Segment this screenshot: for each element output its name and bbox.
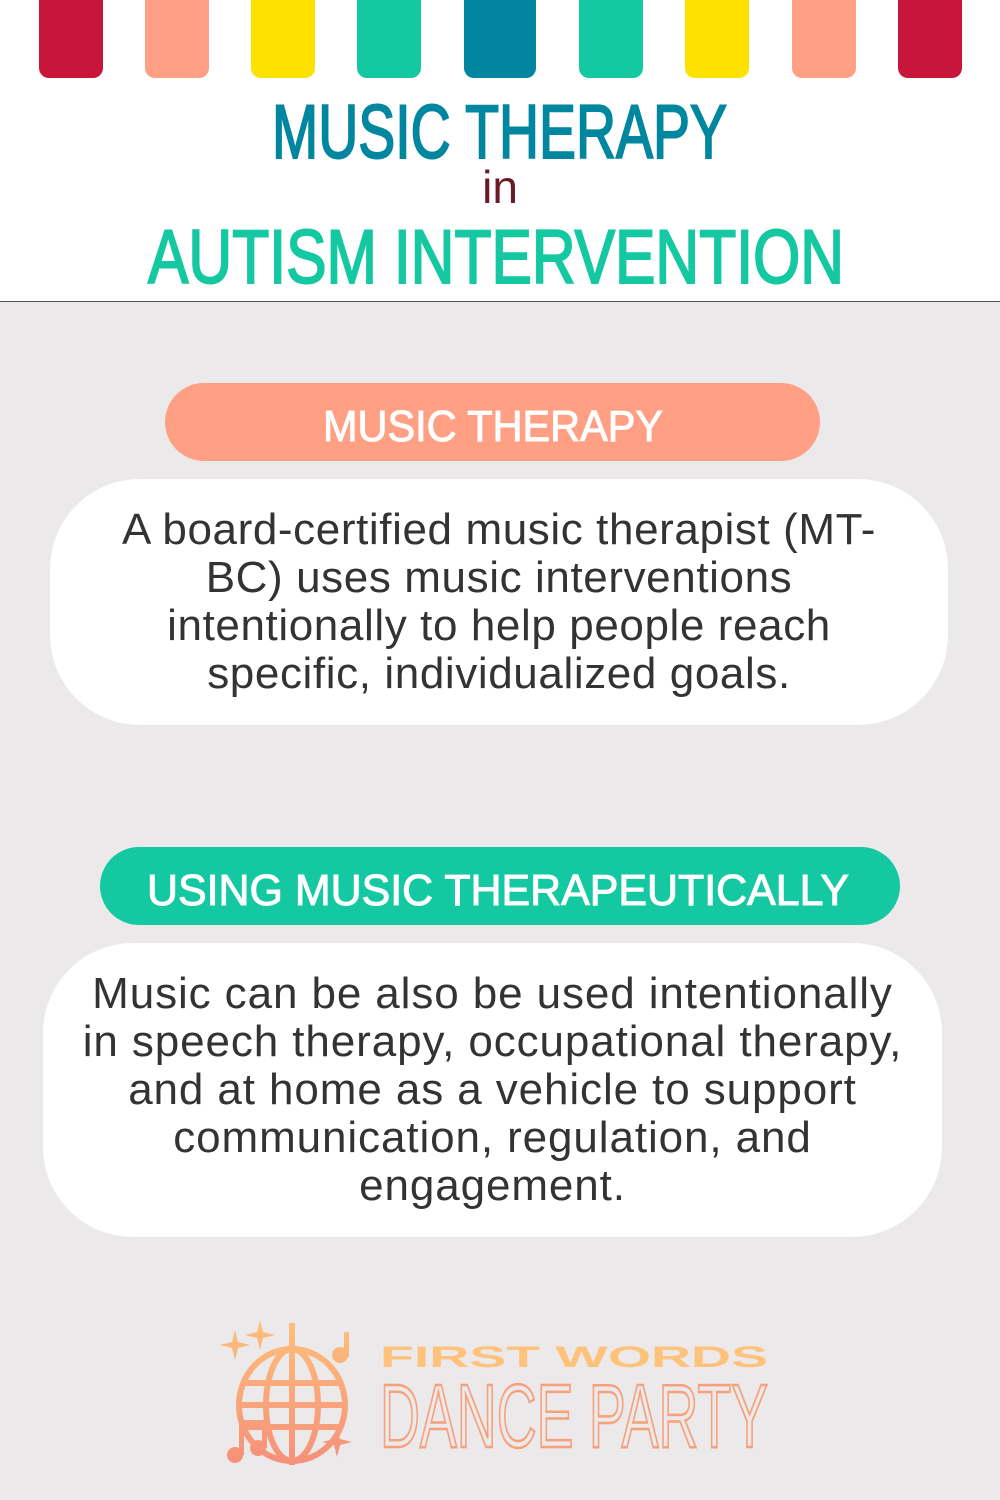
text box: music therapy definition: BC) uses music interventions <box>206 553 792 602</box>
icon: disco globe with notes <box>220 1320 352 1465</box>
text box: using music: engagement. <box>359 1161 626 1210</box>
text box: using music <box>43 943 942 1237</box>
color bars <box>39 0 962 78</box>
text box: music therapy definition: specific, individualized goals. <box>207 649 791 698</box>
logo text: FIRST WORDS <box>380 1341 768 1374</box>
text box: using music: in speech therapy, occupational therapy, <box>83 1017 902 1066</box>
text box: music therapy definition: intentionally to help people reach <box>167 601 831 650</box>
text box: using music: communication, regulation, and <box>173 1113 812 1162</box>
text box: music therapy definition: A board-certified music therapist (MT- <box>122 505 876 554</box>
heading pill: music therapy <box>165 383 820 461</box>
header white area <box>0 0 1000 302</box>
heading pill: using music therapeutically: USING MUSIC THERAPEUTICALLY <box>147 866 849 915</box>
title: in <box>482 161 518 213</box>
text box: using music: and at home as a vehicle to support <box>128 1065 857 1114</box>
title: MUSIC THERAPY <box>272 90 727 175</box>
heading pill: music therapy: MUSIC THERAPY <box>323 402 663 451</box>
title <box>147 90 844 295</box>
text box: music therapy definition <box>50 479 948 725</box>
text box: using music: Music can be also be used intentionally <box>92 969 893 1018</box>
heading pill: using music therapeutically <box>100 847 900 925</box>
logo <box>220 1320 768 1467</box>
